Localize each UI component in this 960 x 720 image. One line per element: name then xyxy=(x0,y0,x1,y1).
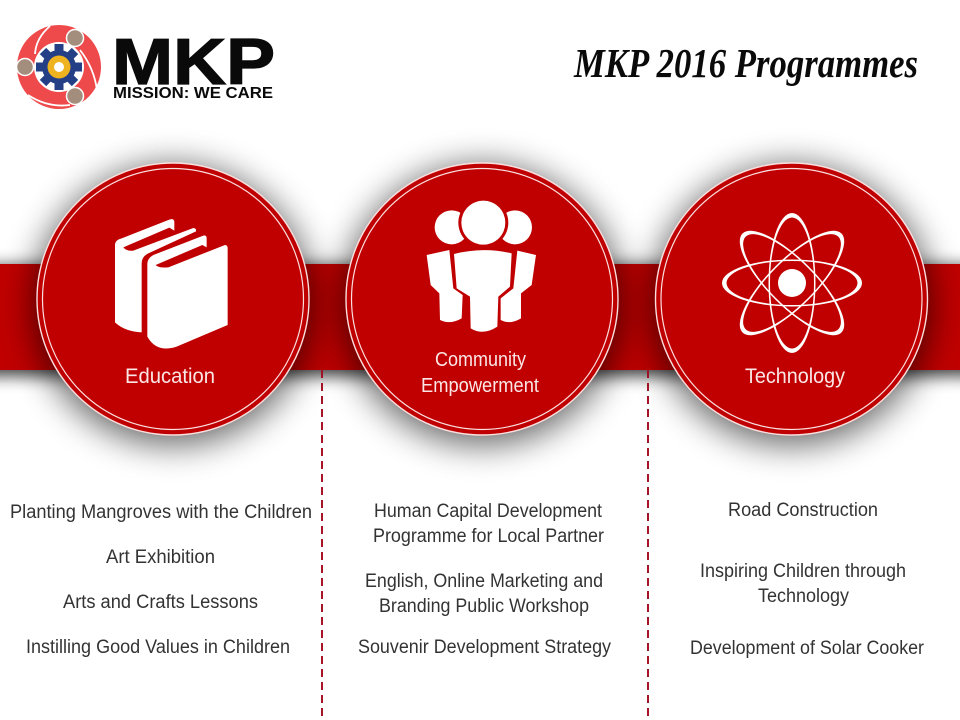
band shadow xyxy=(0,266,960,376)
label: community empowerment: Empowerment xyxy=(421,375,539,397)
text block: education programmes: Instilling Good Values in Children xyxy=(26,637,290,658)
panel: education circle xyxy=(33,163,313,445)
text block: community programmes: Branding Public Workshop xyxy=(379,596,589,617)
label: technology: Technology xyxy=(745,365,845,388)
dashed divider right xyxy=(647,370,649,716)
text block: technology programmes: Technology xyxy=(758,586,849,607)
text block: community programmes: English, Online Marketing and xyxy=(365,571,603,592)
label: community empowerment: Community xyxy=(435,349,526,371)
logo wordmark: MKP xyxy=(112,25,275,98)
icon: books xyxy=(115,219,228,349)
logo tagline: MISSION: WE CARE xyxy=(113,85,273,102)
panel: technology circle xyxy=(652,163,932,445)
text block: community programmes xyxy=(358,501,611,658)
text block: community programmes: Souvenir Development Strategy xyxy=(358,637,611,658)
text block: technology programmes xyxy=(690,500,925,659)
label: community empowerment xyxy=(421,349,539,397)
text block: technology programmes: Inspiring Children through xyxy=(700,561,906,582)
panel: community empowerment circle xyxy=(342,163,622,445)
text block: education programmes: Art Exhibition xyxy=(106,547,215,568)
icon: people xyxy=(427,198,536,332)
label: education: Education xyxy=(125,365,215,388)
text block: technology programmes: Road Construction xyxy=(728,500,878,521)
logo emblem xyxy=(16,25,101,109)
text block: technology programmes: Development of Solar Cooker xyxy=(690,638,925,659)
text block: education programmes xyxy=(10,502,312,658)
logo xyxy=(16,25,275,109)
text block: community programmes: Human Capital Development xyxy=(374,501,603,522)
red band xyxy=(0,264,960,370)
text block: education programmes: Arts and Crafts Lessons xyxy=(63,592,258,613)
text block: education programmes: Planting Mangroves with the Children xyxy=(10,502,312,523)
icon: atom xyxy=(722,213,862,353)
text block: community programmes: Programme for Local Partner xyxy=(373,526,605,547)
dashed divider left xyxy=(321,370,323,716)
